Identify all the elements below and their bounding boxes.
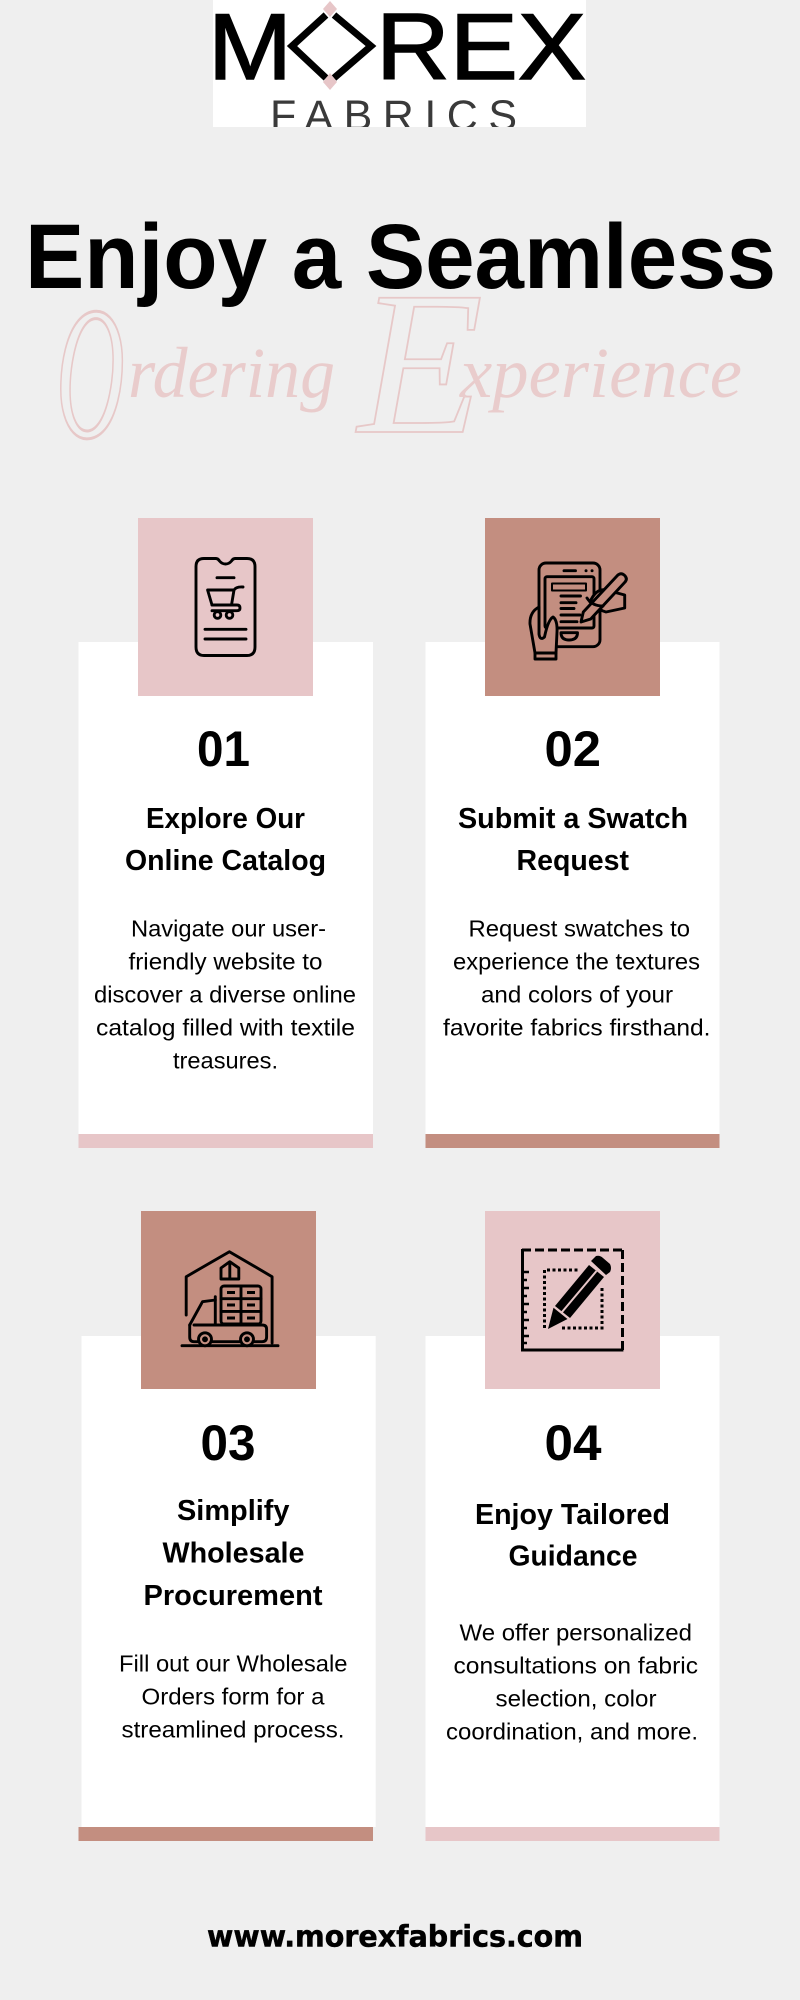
script subtitle: xperience — [459, 333, 742, 413]
panel: step 04 — [426, 1211, 720, 1841]
step body 01: catalog filled with textile — [96, 1014, 355, 1040]
panel: step 02 — [426, 518, 720, 1148]
accent bar 02 — [426, 1134, 720, 1148]
step body 04: We offer personalized — [460, 1620, 692, 1646]
step body 03: streamlined process. — [122, 1717, 344, 1743]
accent bar 04 — [426, 1827, 720, 1841]
icon tile 03 — [141, 1211, 316, 1389]
step heading 04: Guidance — [508, 1541, 638, 1573]
step body 01: Navigate our user- — [131, 916, 326, 942]
step heading 02: Submit a Swatch — [458, 803, 688, 835]
step heading 03: Procurement — [144, 1580, 323, 1612]
step body 04: coordination, and more. — [446, 1719, 698, 1745]
icon tile 01 — [138, 518, 313, 696]
icon tile 04 — [485, 1211, 660, 1389]
step number 03: 03 — [200, 1415, 256, 1471]
step heading 01: Explore Our — [146, 803, 305, 835]
step heading 03: Wholesale — [162, 1538, 304, 1570]
step body 02: experience the textures — [453, 949, 700, 975]
script subtitle: rdering — [128, 333, 335, 413]
logo: Morex Fabrics: FABRICS — [270, 92, 517, 140]
script subtitle: O — [56, 269, 125, 479]
accent bar 03 — [78, 1827, 373, 1841]
accent bar 01 — [78, 1134, 373, 1148]
icon: warehouse and delivery truck — [182, 1252, 278, 1346]
script subtitle — [56, 250, 742, 479]
step body 01 — [94, 916, 356, 1073]
step heading 01: Online Catalog — [125, 845, 326, 877]
step body 04: selection, color — [496, 1686, 657, 1712]
step body 02: and colors of your — [481, 982, 673, 1008]
website url: www.morexfabrics.com — [207, 1920, 583, 1954]
step number 04: 04 — [544, 1415, 602, 1471]
panel: step 01 — [78, 518, 373, 1148]
step heading 01 — [125, 803, 326, 877]
title: Enjoy a Seamless — [25, 206, 776, 308]
step body 01: discover a diverse online — [94, 982, 356, 1008]
icon: pencil on dashed sketch sheet — [522, 1249, 623, 1350]
step number 01: 01 — [197, 721, 250, 777]
icon tile 02 — [485, 518, 660, 696]
icon: tablet form with hand and pen — [530, 563, 626, 659]
step body 01: friendly website to — [128, 949, 322, 975]
step body 03: Orders form for a — [142, 1684, 325, 1710]
step body 02: Request swatches to — [468, 916, 690, 942]
step heading 03 — [144, 1495, 323, 1612]
panel: step 03 — [78, 1211, 376, 1841]
step body 03 — [119, 1651, 348, 1743]
step heading 03: Simplify — [177, 1495, 290, 1527]
logo: Morex Fabrics — [213, 0, 586, 127]
step body 04: consultations on fabric — [454, 1653, 698, 1679]
step body 03: Fill out our Wholesale — [119, 1651, 348, 1677]
step heading 04: Enjoy Tailored — [475, 1499, 670, 1531]
step body 02 — [443, 916, 710, 1040]
step body 04 — [446, 1620, 698, 1745]
step number 02: 02 — [544, 721, 601, 777]
step body 01: treasures. — [173, 1047, 278, 1073]
step body 02: favorite fabrics firsthand. — [443, 1014, 710, 1040]
script subtitle: E — [355, 250, 483, 477]
step heading 02: Request — [516, 845, 629, 877]
step heading 02 — [458, 803, 688, 877]
step heading 04 — [475, 1499, 670, 1573]
icon: phone with shopping cart — [196, 558, 255, 656]
